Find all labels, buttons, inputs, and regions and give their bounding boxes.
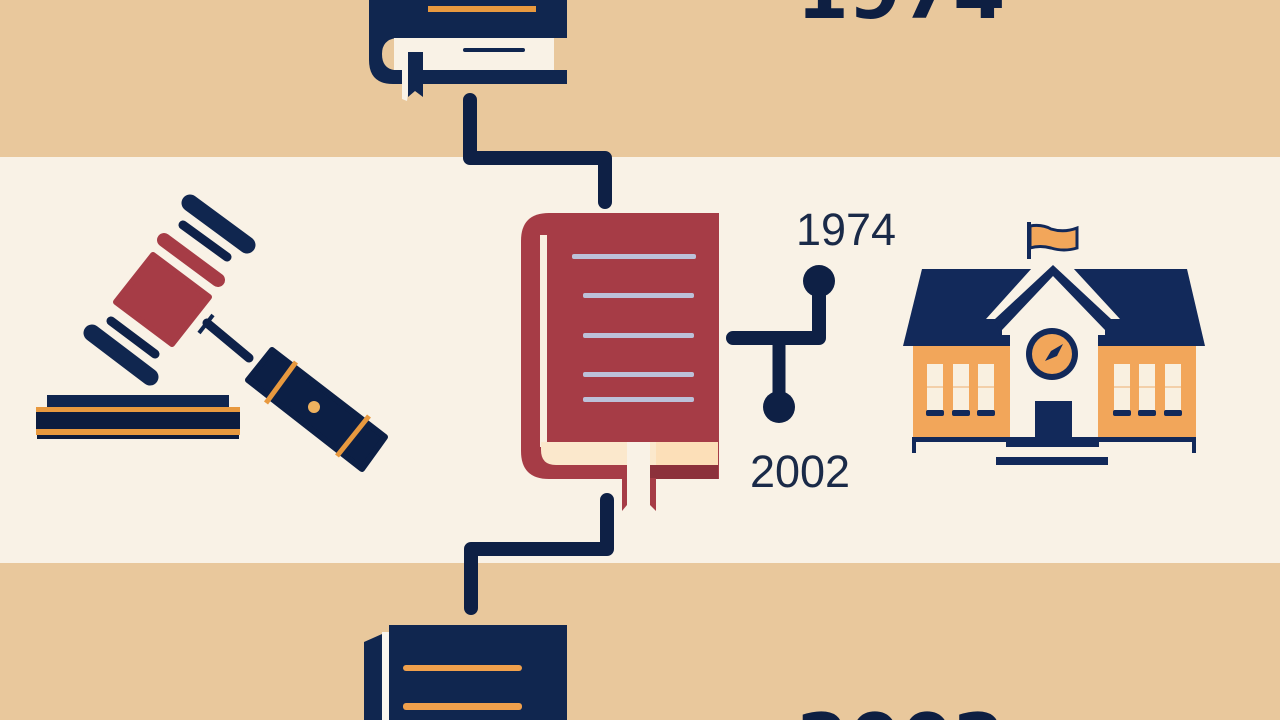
school flag [1027,222,1077,259]
school door [1035,401,1072,438]
panel: bottom band [0,563,1280,720]
gavel sound block [36,395,240,439]
icon: gavel [36,203,385,469]
icon: bottom navy book [364,625,567,720]
ribbon bookmark [622,478,656,511]
gavel handle [199,315,385,469]
icon: top navy book [369,0,567,101]
label: year 1974: 1974 [796,204,896,255]
arrow: bottom connector [471,500,607,608]
icon: school building [903,222,1205,465]
chart: mini branch connector [733,265,835,423]
book text lines [572,254,696,402]
label: year 2002: 2002 [750,446,850,497]
school gable [986,265,1120,437]
school clock [1026,328,1078,380]
panel: middle band [0,157,1280,563]
school base [912,437,1196,465]
panel: top band [0,0,1280,157]
school walls [913,346,1196,437]
icon: central red book [521,213,719,511]
arrow: top connector [470,100,605,202]
gavel head [92,203,247,377]
school roof [903,269,1205,346]
school windows [926,364,1182,416]
